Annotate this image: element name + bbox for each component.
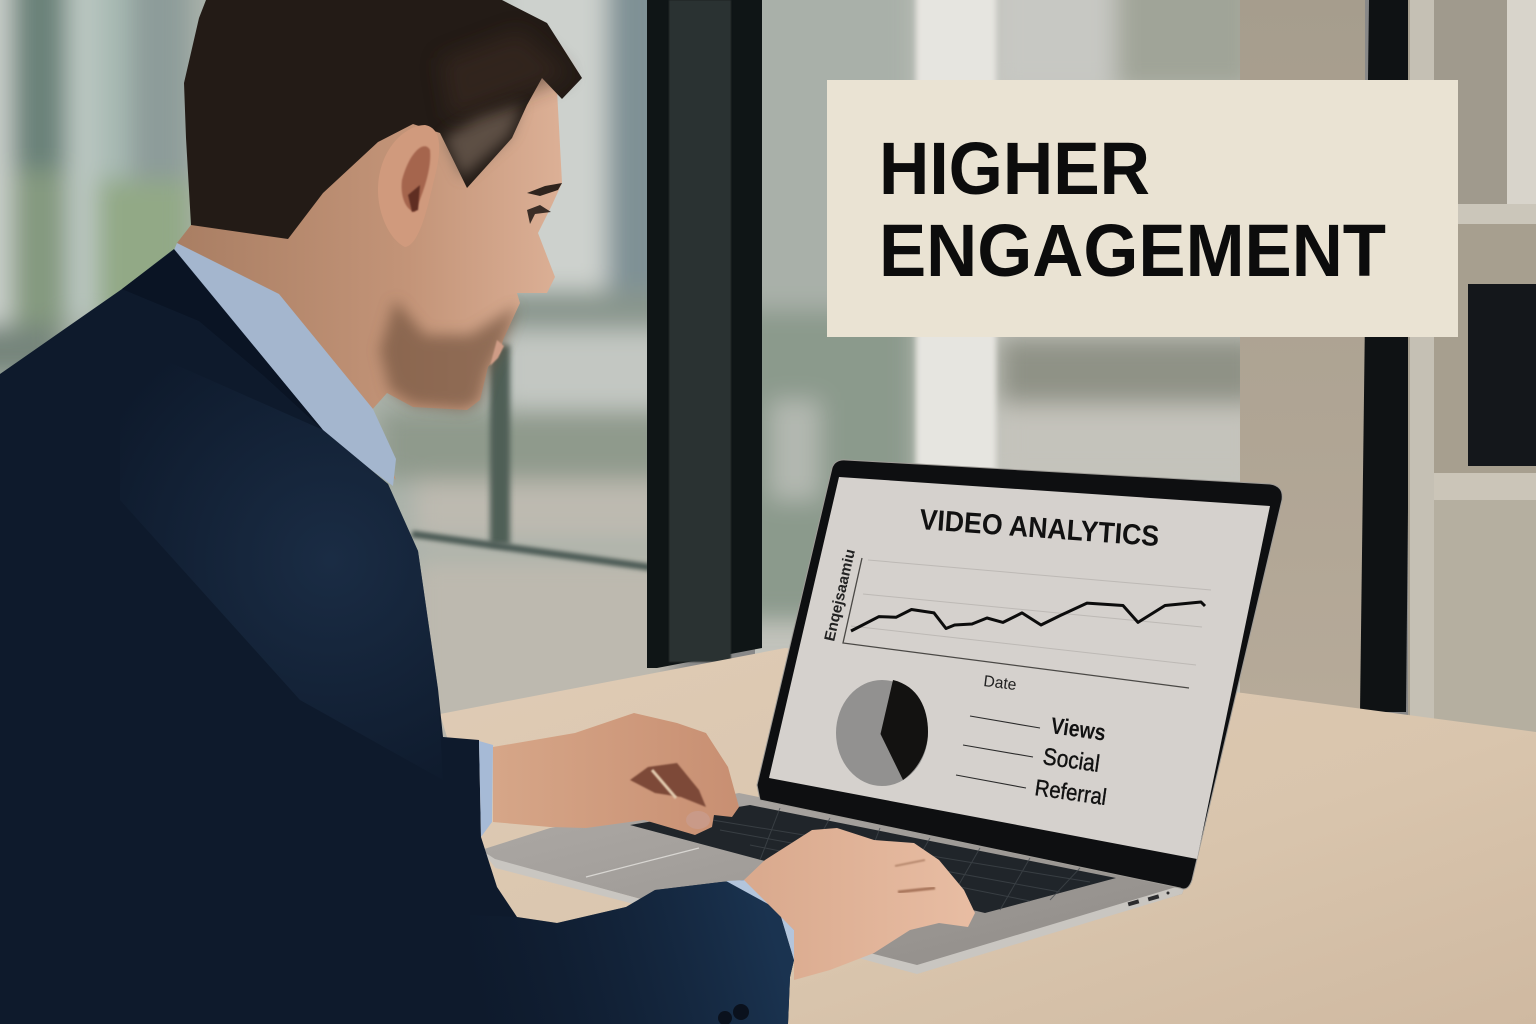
laptop screen xyxy=(769,477,1270,859)
engagement line chart xyxy=(821,547,1211,694)
right hand on keyboard xyxy=(744,828,975,980)
right shirt cuff xyxy=(726,880,794,960)
x axis label: Date xyxy=(983,673,1017,694)
laptop base xyxy=(481,793,1186,974)
dark box on shelf xyxy=(1468,284,1536,466)
pie legend xyxy=(956,712,1108,810)
shoulder highlight xyxy=(120,340,443,780)
title panel xyxy=(827,80,1458,337)
shelving unit xyxy=(1408,0,1536,740)
jacket body and arm xyxy=(0,249,794,1024)
ports xyxy=(1128,892,1170,906)
pie chart xyxy=(836,680,928,786)
pie legend: Views xyxy=(1049,712,1107,746)
thumbnail xyxy=(686,811,710,829)
neck and face xyxy=(177,60,562,480)
eyebrow xyxy=(527,183,562,196)
background: office windows and wall xyxy=(0,0,1536,750)
lapel collar xyxy=(122,250,323,430)
left shirt cuff xyxy=(479,741,493,837)
pie legend: Referral xyxy=(1033,774,1108,810)
stubble beard xyxy=(380,300,518,410)
laptop lid and bezel xyxy=(757,460,1282,889)
eye xyxy=(527,205,551,224)
dark window post left xyxy=(647,0,762,668)
screen title: VIDEO ANALYTICS xyxy=(918,504,1160,553)
y axis label: Enqejsaamiu xyxy=(821,547,859,643)
jacket buttons xyxy=(718,1004,749,1024)
right window view xyxy=(740,0,1260,700)
left hand on keyboard xyxy=(493,713,739,835)
pale column xyxy=(916,0,996,480)
pie legend: Social xyxy=(1041,743,1101,778)
person xyxy=(0,0,975,1024)
laptop xyxy=(481,460,1282,974)
title line two: ENGAGEMENT xyxy=(879,209,1386,292)
dark window post right xyxy=(1360,0,1413,712)
beige wall xyxy=(1240,0,1365,710)
keyboard xyxy=(630,805,1116,913)
title line one: HIGHER xyxy=(879,127,1150,210)
ear xyxy=(378,125,439,247)
forearm highlight xyxy=(470,880,794,1024)
table xyxy=(440,648,1536,1024)
left window view xyxy=(0,0,675,750)
shirt collar xyxy=(174,243,396,486)
hair xyxy=(184,0,582,239)
